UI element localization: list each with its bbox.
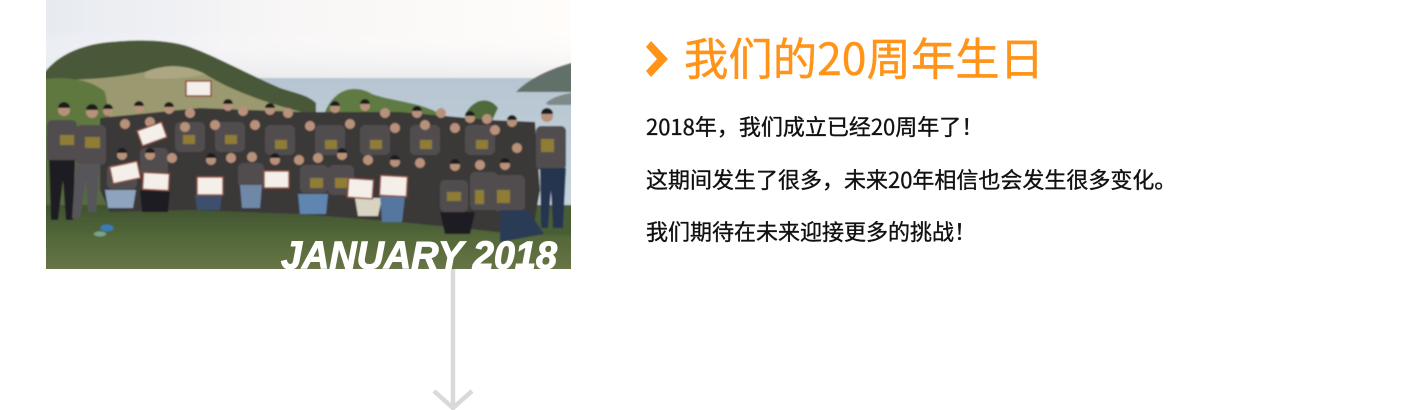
text block: paragraph two: 这期间发生了很多，未来20年相信也会发生很多变化。 [646,163,1176,195]
distant headland [516,63,580,92]
crowd mass [100,108,540,236]
text block: paragraph one: 2018年，我们成立已经20周年了！ [646,110,983,142]
grass toys [94,224,114,236]
heading: 我们的20周年生日 [684,23,1044,88]
sea [240,78,580,228]
held certificate signs [110,81,408,199]
icon: orange chevron [646,41,668,77]
jeans and legs [49,160,566,242]
shirt logos [60,135,554,204]
sky [40,0,580,80]
hill [40,40,316,150]
shirts [47,120,566,212]
grass [40,135,580,275]
arrow: timeline down arrow [432,269,474,410]
scene painting [40,0,580,275]
text block: paragraph three: 我们期待在未来迎接更多的挑战！ [646,215,976,247]
heads [58,101,553,171]
photo: team group on hillside with date caption [46,0,571,269]
foliage [40,78,498,150]
hair [58,99,553,164]
